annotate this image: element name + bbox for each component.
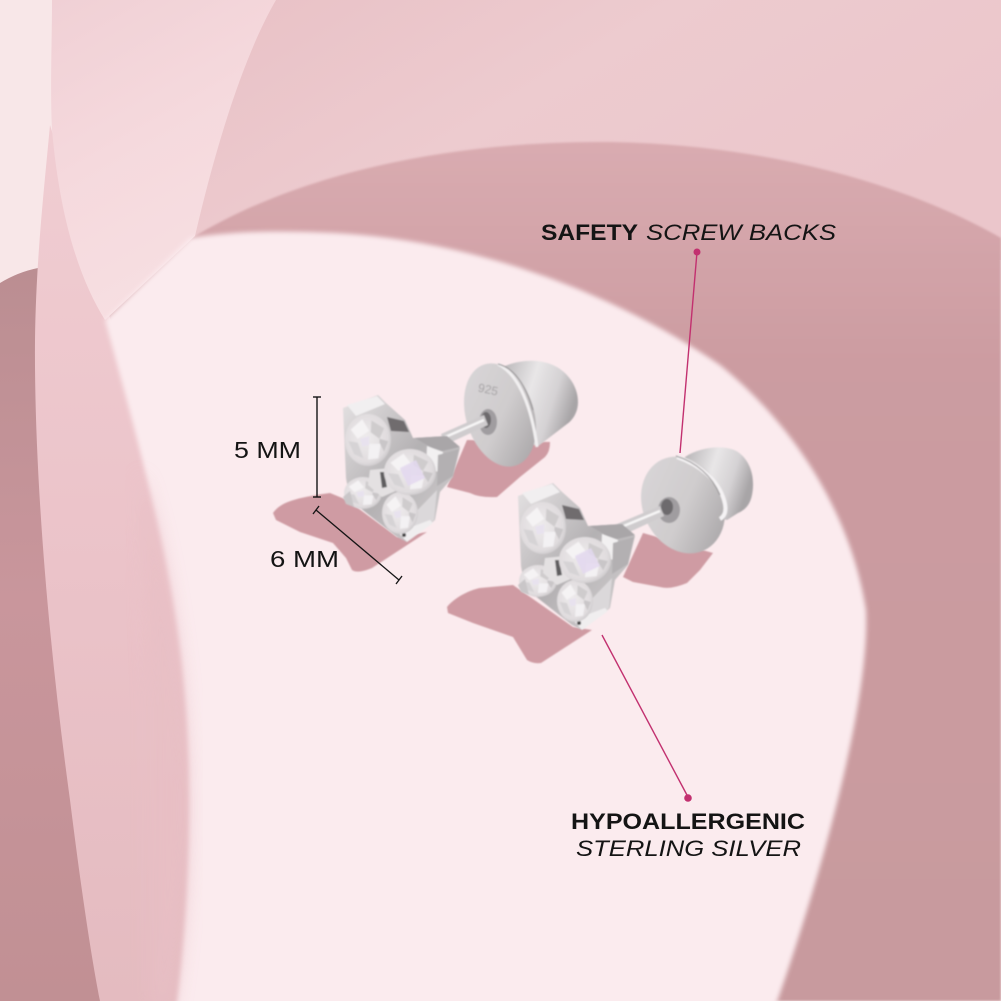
- left back cap: [452, 354, 578, 476]
- heading: safety screw backs: [541, 220, 836, 245]
- left stud front: [343, 395, 460, 542]
- dimension: 5 mm: [234, 397, 321, 497]
- callout line: safety screw backs: [680, 248, 700, 453]
- left back cap: 925: [477, 381, 500, 399]
- heading: safety screw backs: SAFETY: [541, 220, 638, 245]
- dimension: 6 mm: [270, 506, 402, 584]
- heading: hypoallergenic sterling silver: HYPOALLERGENIC: [571, 809, 805, 834]
- dimension: 5 mm: 5 MM: [234, 437, 301, 463]
- callout line: hypoallergenic: [602, 635, 692, 802]
- right earring shadow: [447, 533, 713, 663]
- background: left ribbon: [35, 125, 200, 1001]
- dimension: 6 mm: 6 MM: [270, 546, 339, 572]
- heading: safety screw backs: SCREW BACKS: [646, 220, 836, 245]
- left earring shadow: [273, 440, 550, 572]
- background: light patch: [105, 232, 866, 1001]
- background: curved shadow: [105, 142, 1001, 1001]
- right back cap: [626, 443, 753, 567]
- right post: [617, 506, 664, 536]
- heading: hypoallergenic sterling silver: [571, 809, 805, 861]
- heading: hypoallergenic sterling silver: STERLING SILVER: [576, 836, 801, 861]
- background: pale ribbon fold: [51, 0, 276, 320]
- left post: [441, 415, 488, 445]
- background: soft shadow edge along ribbon: [140, 470, 188, 1001]
- right stud front: [518, 483, 635, 630]
- left earring: [343, 354, 578, 542]
- background: lower left shadow: [0, 268, 110, 1001]
- background: top pink ribbon band: [150, 0, 1001, 260]
- right earring: [518, 443, 753, 630]
